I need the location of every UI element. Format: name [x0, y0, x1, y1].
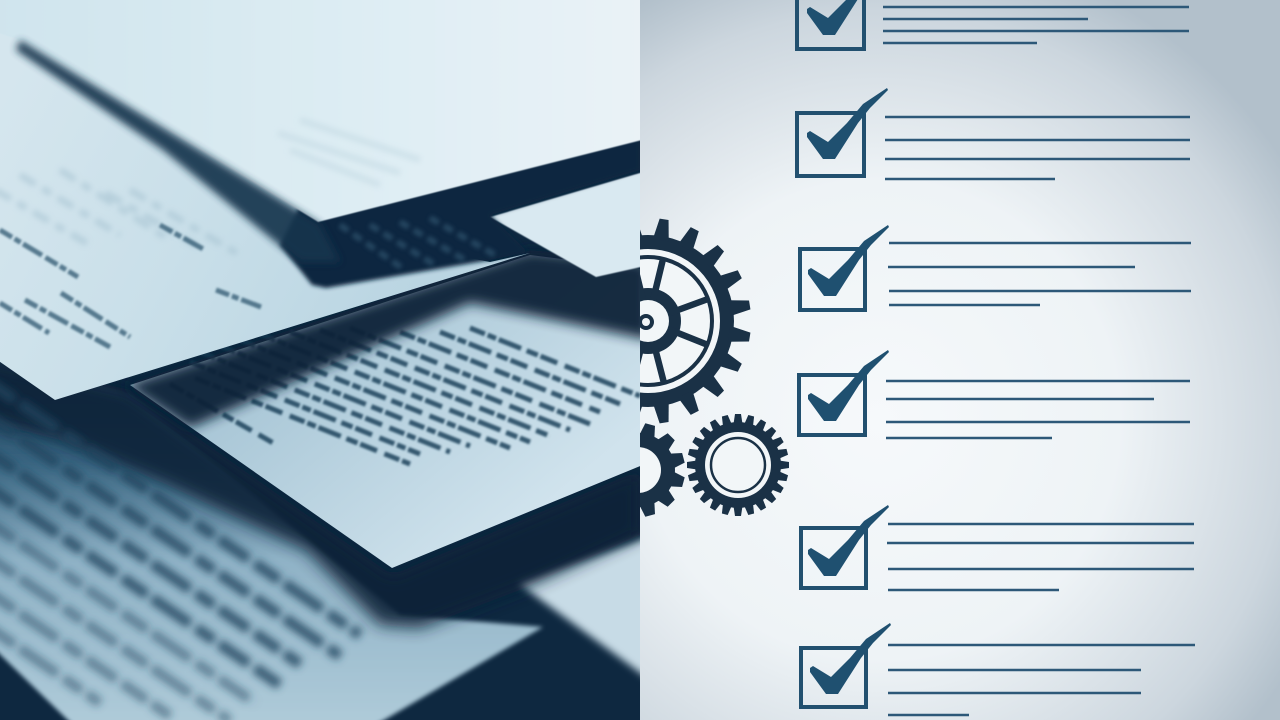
checklist item 2 — [797, 88, 1190, 179]
icon: checkbox 6 — [801, 623, 891, 707]
checklist item 3 — [800, 225, 1191, 310]
icon: right small gear — [687, 414, 789, 516]
text lines 5 — [887, 524, 1194, 590]
text lines 4 — [886, 381, 1190, 438]
text lines 3 — [888, 243, 1191, 305]
upper-right document sheet — [490, 170, 650, 277]
checklist item 1 — [797, 0, 1189, 49]
lower blurred document sheet — [0, 350, 543, 720]
text lines 1 — [883, 7, 1189, 43]
checklist item 6 — [801, 623, 1195, 715]
dark shadow under middle sheet — [0, 355, 640, 628]
checklist item 4 — [799, 350, 1190, 438]
icon: checkbox 1 — [797, 0, 888, 49]
text lines 2 — [885, 117, 1190, 179]
second document sheet with text — [0, 0, 530, 400]
icon: gears — [640, 218, 789, 517]
checklist item 5 — [801, 505, 1194, 590]
bottom-right document sheet — [518, 536, 650, 680]
icon: checkbox 3 — [800, 225, 889, 310]
shadow wedge under top sheet edge — [16, 40, 340, 262]
icon: checkbox 5 — [801, 505, 889, 588]
top document sheet — [162, 0, 640, 222]
dark band and shadow under top sheet — [278, 172, 640, 292]
icon: checkbox 2 — [797, 88, 888, 176]
panel: blurred stacked documents photo — [0, 0, 650, 720]
middle document sheet with text — [125, 250, 650, 568]
icon: large gear — [640, 218, 750, 424]
icon: left small gear — [640, 423, 685, 517]
icon: checkbox 4 — [799, 350, 889, 435]
panel: checklist background — [640, 0, 1280, 720]
text lines 6 — [888, 645, 1195, 715]
lower sheet text rows — [0, 383, 360, 720]
